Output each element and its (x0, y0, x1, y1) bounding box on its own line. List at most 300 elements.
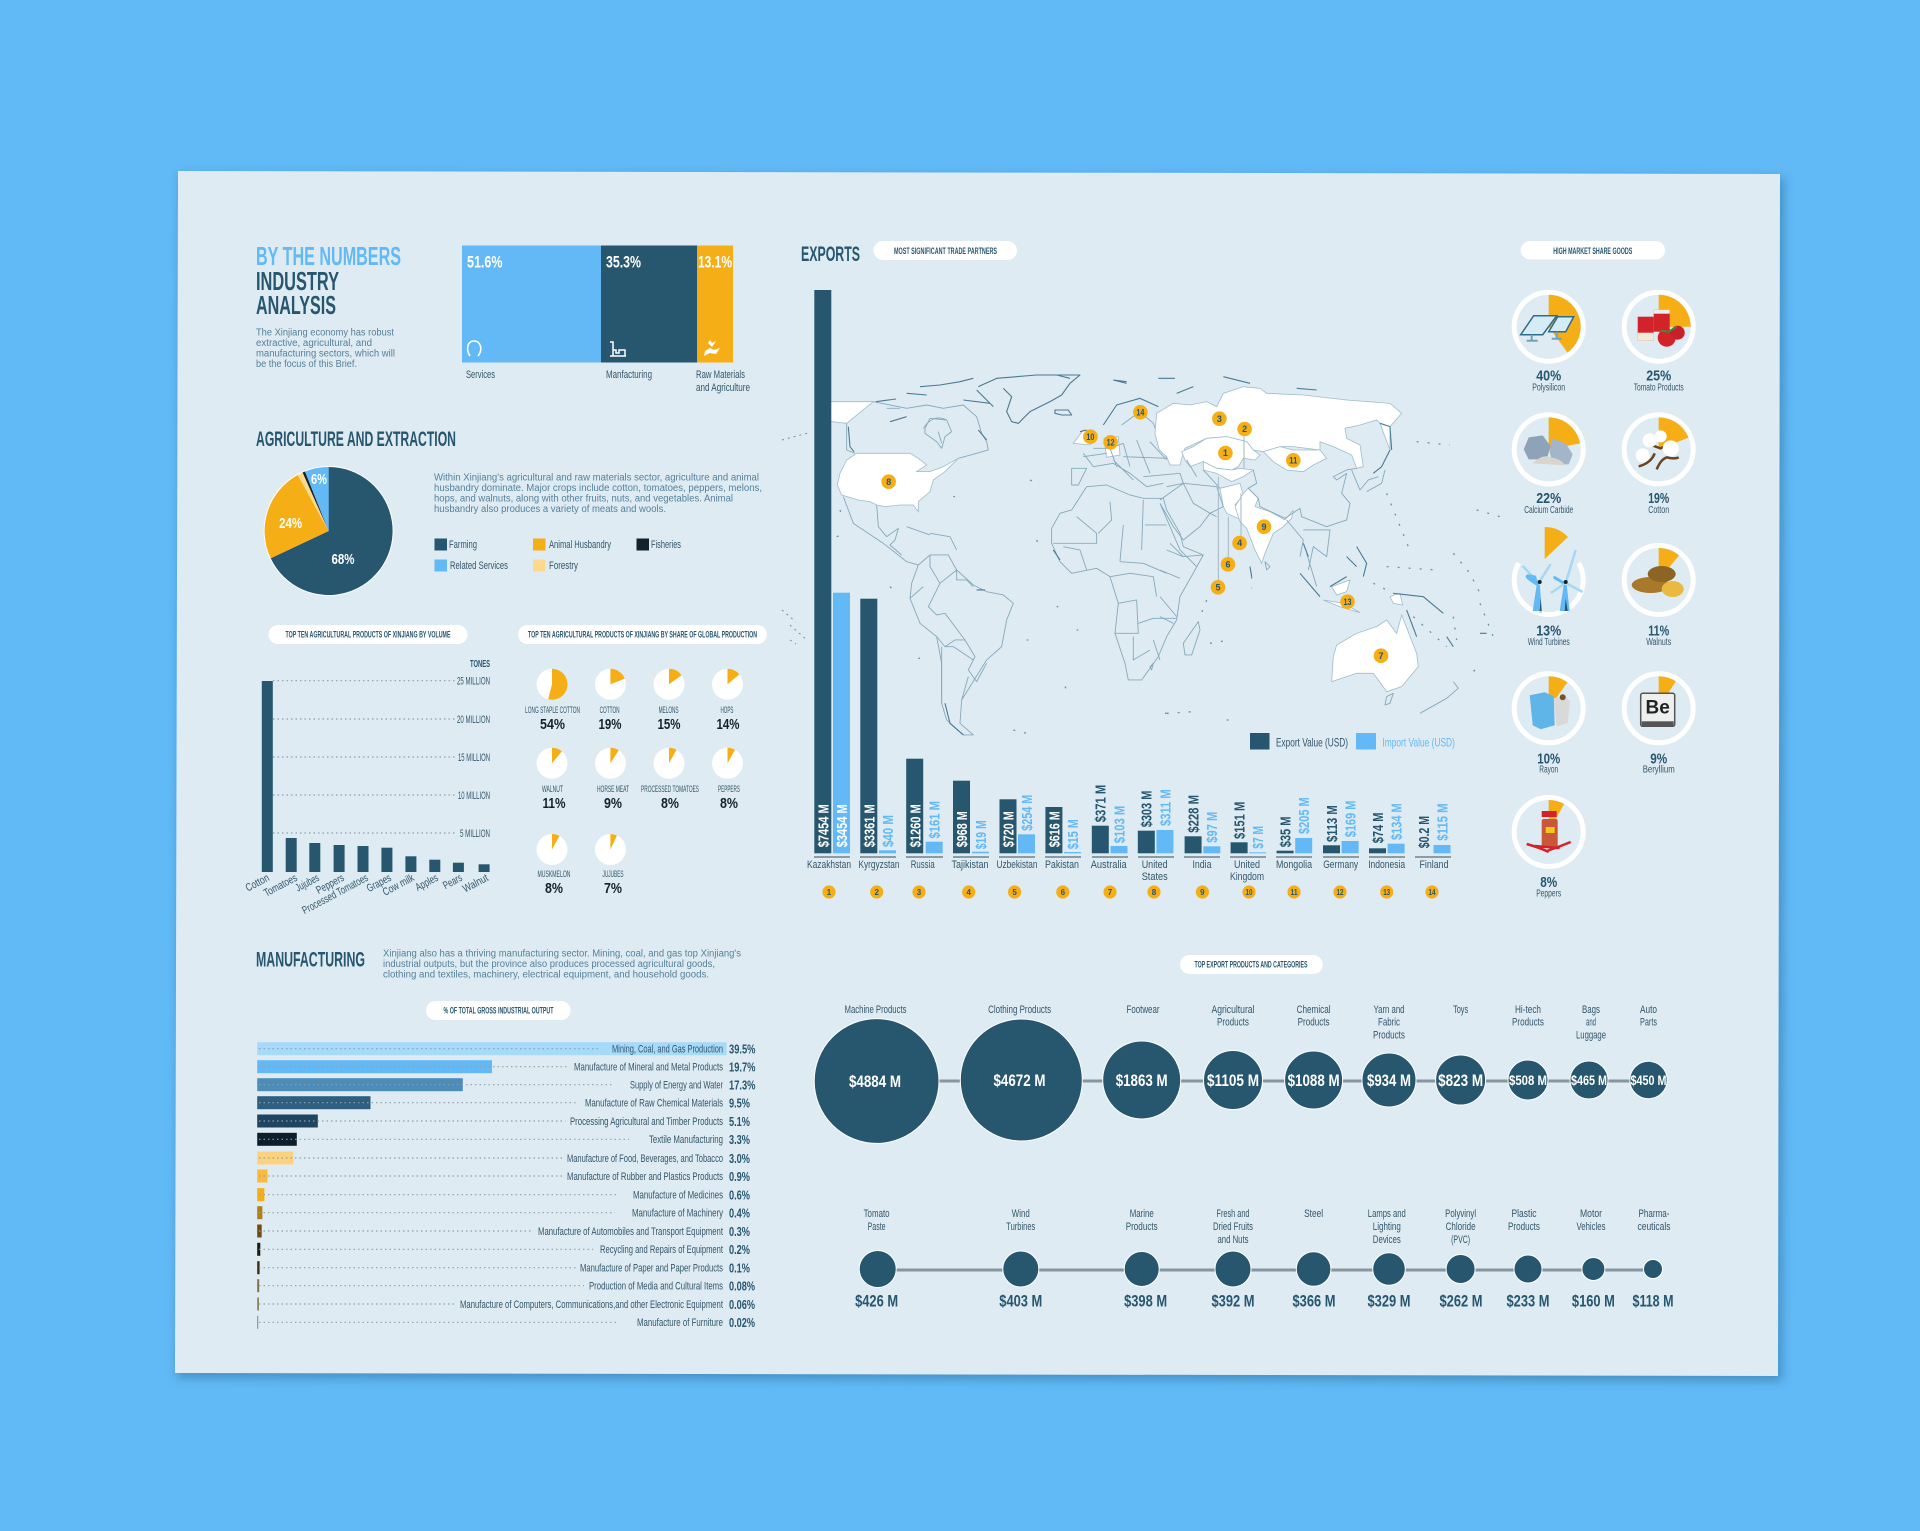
bubble row 1: Clothing Products (988, 1004, 1051, 1016)
bubble row 1: Luggage (1576, 1030, 1606, 1042)
trade partner bar chart: Australia (1091, 859, 1127, 871)
bubble row 1: Bags (1582, 1004, 1600, 1016)
map markers: 1 (1223, 448, 1228, 458)
bubble row 2: $329 M (1368, 1292, 1410, 1311)
share pies: 8% (720, 795, 738, 812)
tomato products (1624, 292, 1693, 394)
panel: top export products (814, 955, 1674, 1311)
bar chart: volume: Cow milk (381, 872, 417, 899)
beryllium: Be (1646, 697, 1670, 718)
peppers: Peppers (1536, 888, 1561, 900)
share pies: HOPS (720, 705, 734, 715)
trade partner bar chart: 2 (874, 888, 879, 897)
map: americas, atlantic, africa and europe (817, 375, 1203, 735)
trade partner bar chart: Russia (911, 859, 935, 871)
trade partner bar chart: 7 (1108, 888, 1113, 897)
panel: by the numbers (256, 241, 750, 394)
pill heading: TOP TEN AGRICULTURAL PRODUCTS OF XINJIANG BY SHARE OF GLOBAL PRODUCTION (528, 630, 757, 640)
trade partner bar chart: 1 (827, 888, 832, 897)
bar chart: volume: TONES (470, 659, 490, 670)
bar chart: industrial output: 0.1% (729, 1260, 750, 1276)
stacked bar: economy by sector: Services (466, 369, 495, 381)
map markers: 3 (1217, 414, 1222, 424)
bar chart: industrial output: 9.5% (729, 1096, 750, 1110)
map markers: 4 (1237, 538, 1242, 548)
manufacturing text: Xinjiang also has a thriving manufacturing sector. Mining, coal, and gas top Xinjiang's (383, 948, 741, 960)
wind turbines: Wind Turbines (1528, 637, 1570, 648)
bar chart: volume: Apples (414, 872, 441, 894)
bar chart: industrial output: Supply of Energy and Water (630, 1080, 723, 1092)
bar chart: industrial output: 17.3% (729, 1078, 756, 1092)
trade partner bar chart: Kyrgyzstan (858, 859, 900, 871)
bubble row 2: Plastic (1512, 1208, 1537, 1220)
trade partner bar chart: $161 M (926, 801, 944, 838)
panel: top ten by volume (244, 625, 490, 917)
trade partner bar chart: United (1142, 859, 1168, 871)
bubble row 2: (PVC) (1451, 1234, 1470, 1246)
polysilicon (1514, 292, 1583, 394)
stacked bar: economy by sector: 51.6% (467, 252, 502, 272)
bar chart: volume: 5 MILLION (460, 828, 490, 840)
map markers: 14 (1136, 408, 1144, 418)
bubble row 2: Chloride (1446, 1221, 1476, 1233)
bubble row 1: Hi-tech (1515, 1004, 1541, 1016)
title: BY THE NUMBERS (256, 241, 401, 271)
heading: MANUFACTURING (256, 948, 365, 972)
calcium carbide: 22% (1536, 490, 1561, 507)
trade partner bar chart: 10 (1246, 888, 1253, 897)
trade partner bar chart: $1260 M (908, 804, 924, 847)
wind turbines (1514, 527, 1583, 648)
trade partner bar chart: $3454 M (834, 804, 851, 847)
share pies: 14% (716, 716, 740, 733)
bar chart: industrial output: 3.0% (729, 1151, 750, 1166)
bubble row 2: $398 M (1124, 1292, 1167, 1311)
calcium carbide (1514, 415, 1583, 516)
pill heading: TOP TEN AGRICULTURAL PRODUCTS OF XINJIANG BY VOLUME (286, 630, 450, 640)
bubble row 2: Tomato (864, 1208, 890, 1220)
bubble row 2: $262 M (1440, 1292, 1482, 1311)
bubble row 2: Turbines (1006, 1221, 1036, 1233)
trade partner bar chart: Mongolia (1276, 859, 1313, 871)
bar chart: industrial output: 3.3% (729, 1132, 750, 1147)
bubble row 2: Products (1126, 1221, 1158, 1233)
trade partner bar chart: $35 M (1278, 817, 1294, 847)
trade partner bar chart: 11 (1290, 888, 1298, 897)
pie chart: agriculture breakdown: 68% (332, 551, 354, 568)
map markers: 9 (1261, 522, 1267, 532)
bar chart: industrial output: Manufacture of Paper and Paper Products (580, 1262, 723, 1274)
bar chart: industrial output: 0.4% (729, 1206, 750, 1220)
walnuts: Walnuts (1646, 637, 1671, 648)
bubble row 2: $392 M (1212, 1292, 1254, 1311)
share pies: 11% (542, 795, 566, 812)
pill heading: % OF TOTAL GROSS INDUSTRIAL OUTPUT (444, 1006, 554, 1016)
intro text: extractive, agricultural, and (256, 338, 372, 349)
bar chart: industrial output (257, 1042, 756, 1330)
exports heading: EXPORTS (801, 243, 860, 266)
trade partner bar chart: $0.2 M (1416, 816, 1433, 848)
pill heading (1521, 241, 1665, 260)
beryllium: Beryllium (1643, 764, 1675, 775)
pie legend: Animal Husbandry (549, 539, 611, 551)
trade partner bar chart: Pakistan (1045, 859, 1079, 871)
pie chart: agriculture breakdown: 6% (311, 471, 327, 488)
cotton (1624, 415, 1693, 516)
share pies: PEPPERS (718, 784, 740, 794)
stacked bar: economy by sector: and Agriculture (696, 382, 750, 394)
peppers (1514, 798, 1583, 900)
trade partner bar chart: Kingdom (1230, 871, 1264, 883)
bubble row 1: Machine Products (844, 1004, 907, 1016)
bar chart: industrial output: 39.5% (729, 1042, 756, 1056)
peppers: 8% (1540, 874, 1557, 891)
bubble row 1: $823 M (1438, 1071, 1483, 1090)
pill heading: TOP EXPORT PRODUCTS AND CATEGORIES (1194, 960, 1308, 970)
bubble row 1: $4672 M (994, 1071, 1046, 1090)
bubble row 1: $1088 M (1288, 1071, 1340, 1090)
intro text: manufacturing sectors, which will (256, 348, 395, 360)
trade partner bar chart: 13 (1383, 888, 1391, 897)
trade partner bar chart: Kazakhstan (807, 859, 851, 871)
bar chart: industrial output: 0.3% (729, 1224, 750, 1239)
bubble row 2: Marine (1130, 1208, 1154, 1220)
bar chart: volume: Processed Tomatoes (300, 872, 371, 917)
cotton: 19% (1648, 490, 1669, 507)
rayon (1514, 674, 1583, 775)
pill heading (518, 625, 767, 644)
manufacturing text (383, 948, 741, 980)
trade partner bar chart: Indonesia (1368, 859, 1406, 871)
bar chart: industrial output: Processing Agricultural and Timber Products (570, 1116, 723, 1128)
trade partner bar chart: $303 M (1138, 791, 1156, 827)
trade partner bar chart: $15 M (1065, 819, 1082, 849)
pie legend: Related Services (450, 560, 508, 572)
bubble row 2: $426 M (855, 1292, 898, 1311)
manufacturing text: clothing and textiles, machinery, electrical equipment, and household goods. (383, 970, 709, 980)
bubble row 1: and (1586, 1016, 1596, 1028)
bar chart: industrial output: Manufacture of Medicines (633, 1190, 723, 1202)
bubble row 1: Chemical (1297, 1004, 1331, 1016)
bar chart: industrial output: Textile Manufacturing (649, 1134, 723, 1146)
share pies: 7% (604, 880, 622, 897)
pill heading (1180, 955, 1323, 974)
bubble row 1: $4884 M (849, 1072, 901, 1091)
bubble row 1: $465 M (1571, 1072, 1607, 1088)
bubble row 1 (814, 1004, 1667, 1143)
intro text (256, 328, 395, 370)
map markers: 5 (1215, 582, 1221, 592)
share pies: 19% (598, 716, 622, 733)
trade partner bar chart: $205 M (1296, 797, 1313, 834)
trade partner bar chart: United (1234, 859, 1260, 871)
bar chart: industrial output: Mining, Coal, and Gas Production (612, 1044, 723, 1056)
bubble row 2: Dried Fruits (1213, 1221, 1253, 1233)
walnuts: 11% (1648, 622, 1669, 640)
bubble row 2: $118 M (1632, 1292, 1674, 1311)
trade partner bar chart: $151 M (1232, 802, 1248, 839)
agriculture text: husbandry also produces a variety of meats and wools. (434, 504, 666, 515)
bubble row 1: $934 M (1367, 1071, 1411, 1090)
agriculture text: Within Xinjiang's agricultural and raw materials sector, agriculture and animal (434, 472, 759, 484)
share pies: COTTON (600, 705, 620, 715)
trade partner bar chart: Tajikistan (952, 859, 988, 871)
bar chart: volume: Cotton (244, 872, 271, 894)
stacked bar: economy by sector: Raw Materials (696, 369, 745, 381)
bubble row 2 (855, 1208, 1674, 1311)
bar chart: volume: 15 MILLION (458, 752, 490, 764)
world map (782, 375, 1500, 735)
bar chart: industrial output: 0.08% (729, 1278, 755, 1294)
map markers (881, 405, 1388, 663)
trade partner bar chart: 12 (1336, 888, 1344, 897)
stacked bar: economy by sector: 35.3% (606, 252, 641, 272)
share pies: WALNUT (542, 784, 563, 794)
trade partner bar chart: $311 M (1158, 789, 1174, 826)
bar chart: industrial output: Manufacture of Rubber and Plastics Products (567, 1171, 723, 1183)
bubble row 1: Auto (1640, 1004, 1657, 1016)
bubble row 1: $508 M (1509, 1072, 1547, 1088)
share pies: MELONS (659, 705, 679, 715)
intro text: be the focus of this Brief. (256, 359, 357, 370)
bar chart: volume: Grapes (365, 872, 394, 895)
bar chart: industrial output: 0.02% (729, 1315, 755, 1330)
bubble row 2: Lighting (1373, 1221, 1401, 1233)
pie chart: agriculture breakdown (264, 466, 394, 596)
bar chart: volume: Peppers (314, 872, 347, 897)
trade partner bar chart: 4 (966, 888, 971, 897)
bubble row 2: Fresh and (1216, 1208, 1250, 1220)
cotton: Cotton (1648, 505, 1669, 516)
tomato products: Tomato Products (1634, 383, 1684, 394)
trade partner bar chart: $19 M (973, 820, 990, 849)
trade partner bar chart: Uzbekistan (996, 859, 1038, 871)
share pies: HORSE MEAT (597, 784, 629, 794)
trade partner bar chart: $968 M (954, 811, 971, 847)
rayon: Rayon (1539, 764, 1558, 775)
polysilicon: Polysilicon (1532, 383, 1565, 394)
map legend: Import Value (USD) (1382, 736, 1455, 750)
stacked bar: economy by sector: Manfacturing (606, 369, 652, 381)
trade partner bar chart: $371 M (1092, 785, 1110, 822)
bubble row 2: Steel (1304, 1208, 1323, 1220)
bar chart: volume: Jujubes (294, 872, 322, 894)
bubble row 1: Footwear (1126, 1004, 1160, 1016)
agriculture text: hops, and walnuts, along with other fruits, nuts, and vegetables. Animal (434, 494, 733, 504)
share pies: LONG STAPLE COTTON (525, 705, 580, 715)
bubble row 1: Products (1217, 1016, 1249, 1028)
polysilicon: 40% (1536, 368, 1561, 385)
bubble row 2: and Nuts (1218, 1234, 1249, 1246)
map markers: 7 (1378, 651, 1384, 661)
bar chart: volume: 25 MILLION (457, 676, 490, 688)
rayon: 10% (1537, 750, 1560, 767)
bar chart: industrial output: Manufacture of Raw Chemical Materials (585, 1098, 723, 1110)
bar chart: industrial output: Manufacture of Computers, Communications,and other Electronic Equipment (460, 1299, 723, 1311)
trade partner bar chart: $254 M (1019, 795, 1036, 831)
bubble row 1: Toys (1453, 1004, 1468, 1016)
beryllium: 9% (1650, 750, 1667, 767)
bubble row 2: Vehicles (1576, 1221, 1606, 1233)
bubble row 2: Lamps and (1368, 1208, 1406, 1220)
bubble row 2: Wind (1012, 1208, 1030, 1220)
map markers: 13 (1344, 597, 1352, 607)
pie legend: Farming (449, 539, 477, 551)
bar chart: industrial output: 0.2% (729, 1242, 750, 1257)
stacked bar: economy by sector: 13.1% (698, 252, 732, 272)
bar chart: industrial output: Manufacture of Machinery (632, 1208, 723, 1220)
beryllium (1624, 674, 1693, 775)
agriculture text (434, 472, 762, 515)
bubble row 2: Motor (1580, 1208, 1602, 1220)
bar chart: industrial output: 0.9% (729, 1169, 750, 1184)
map markers: 2 (1242, 424, 1247, 434)
trade partner bar chart: 5 (1012, 888, 1017, 897)
bar chart: industrial output: Manufacture of Food, Beverages, and Tobacco (567, 1153, 723, 1165)
trade partner bar chart: 14 (1428, 888, 1436, 897)
trade partner bar chart: 8 (1152, 888, 1157, 897)
title: ANALYSIS (256, 290, 336, 320)
trade partner bar chart: Finland (1420, 859, 1448, 871)
calcium carbide: Calcium Carbide (1524, 505, 1573, 516)
pie legend (434, 538, 681, 572)
map markers: 12 (1107, 438, 1115, 448)
pill heading (268, 625, 468, 644)
share pies: JUJUBES (602, 869, 624, 879)
pill heading: HIGH MARKET SHARE GOODS (1553, 246, 1632, 256)
title: INDUSTRY (256, 266, 339, 296)
bubble row 2: Polyvinyl (1445, 1208, 1476, 1220)
bubble row 2: Pharma- (1638, 1208, 1670, 1220)
bar chart: industrial output: 0.06% (729, 1297, 755, 1312)
map markers: 6 (1225, 560, 1231, 570)
agriculture text: husbandry dominate. Major crops include cotton, tomatoes, peppers, melons, (434, 483, 762, 494)
trade partner bar chart: 9 (1200, 888, 1205, 897)
map markers: 11 (1289, 456, 1297, 466)
trade partner bar chart: $3361 M (862, 804, 878, 847)
pie legend: Forestry (549, 560, 578, 572)
share pies: 8% (661, 795, 679, 812)
trade partner bar chart: Germany (1323, 859, 1359, 871)
bubble row 2: Paste (868, 1221, 886, 1233)
bar chart: industrial output: Manufacture of Mineral and Metal Products (574, 1062, 723, 1074)
pill: most significant trade partners (874, 241, 1017, 260)
trade partner bar chart: $74 M (1370, 813, 1387, 843)
bar chart: industrial output: Manufacture of Automobiles and Transport Equipment (538, 1226, 723, 1238)
trade partner bar chart (807, 290, 1452, 899)
bubble row 1: Yarn and (1374, 1004, 1404, 1016)
bar chart: industrial output: 5.1% (729, 1114, 750, 1129)
trade partner bar chart: $134 M (1388, 803, 1406, 840)
bar chart: volume: Pears (441, 872, 465, 892)
trade partner bar chart: $720 M (1000, 811, 1018, 847)
trade partner bar chart: $103 M (1112, 806, 1128, 843)
bubble row 1: Products (1512, 1016, 1544, 1028)
bar chart: industrial output: 19.7% (729, 1060, 756, 1074)
share pies: 9% (604, 795, 622, 812)
pill heading (426, 1001, 571, 1020)
walnuts (1624, 546, 1693, 648)
trade partner bar chart: $113 M (1324, 805, 1341, 842)
bubble row 1: Fabric (1378, 1016, 1400, 1028)
share pies (525, 669, 743, 897)
bubble row 2: $233 M (1506, 1292, 1550, 1311)
bar chart: volume: 20 MILLION (457, 714, 490, 726)
trade partner bar chart: India (1192, 859, 1212, 871)
bar chart: industrial output: Production of Media and Cultural Items (589, 1280, 723, 1292)
share pies: 15% (658, 716, 680, 733)
bar chart: volume: Walnut (461, 872, 490, 895)
bubble row 1: $1863 M (1116, 1071, 1168, 1090)
title (256, 241, 401, 320)
pie legend: Fisheries (651, 539, 681, 551)
share pies: 8% (545, 880, 563, 897)
bubble row 1: Products (1298, 1016, 1330, 1028)
bubble row 2: ceuticals (1638, 1221, 1671, 1233)
share pies: 54% (540, 716, 565, 733)
map markers: 10 (1086, 432, 1094, 442)
paper sheet (175, 171, 1780, 1376)
bubble row 1: Agricultural (1212, 1004, 1254, 1016)
bubble row 1: Parts (1640, 1016, 1657, 1028)
manufacturing text: industrial outputs, but the province also produces processed agricultural goods, (383, 959, 715, 970)
wind turbines: 13% (1536, 622, 1561, 640)
trade partner bar chart: 6 (1061, 888, 1066, 897)
trade partner bar chart: $7 M (1250, 826, 1267, 849)
map legend (1250, 733, 1455, 750)
bubble row 1: $450 M (1630, 1072, 1666, 1088)
bar chart: industrial output: Recycling and Repairs of Equipment (600, 1244, 723, 1256)
bubble row 1: $1105 M (1207, 1071, 1259, 1090)
bubble row 2: $160 M (1572, 1292, 1615, 1311)
trade partner bar chart: $115 M (1434, 803, 1452, 841)
heading: AGRICULTURE AND EXTRACTION (256, 428, 456, 451)
stacked bar: economy by sector (462, 246, 750, 394)
bubble row 2: $366 M (1292, 1292, 1336, 1311)
panel: high market share goods (1514, 241, 1693, 900)
bubble row 2: Products (1508, 1221, 1540, 1233)
trade partner bar chart: $7454 M (816, 804, 832, 847)
pill: most significant trade partners: MOST SIGNIFICANT TRADE PARTNERS (894, 246, 997, 256)
bubble row 2: $403 M (999, 1292, 1042, 1311)
bubble row 2: Devices (1373, 1234, 1401, 1246)
map legend: Export Value (USD) (1276, 736, 1348, 750)
trade partner bar chart: $616 M (1046, 811, 1064, 847)
share pies: PROCESSED TOMATOES (641, 784, 699, 794)
bar chart: volume (244, 659, 490, 917)
bar chart: volume: Tomatoes (262, 872, 300, 900)
map markers: 8 (886, 477, 891, 487)
trade partner bar chart: $228 M (1186, 795, 1202, 833)
trade partner bar chart: $169 M (1342, 801, 1360, 837)
panel: agriculture and extraction (256, 428, 762, 596)
trade partner bar chart: $97 M (1204, 812, 1221, 843)
bubble row 1: Products (1373, 1030, 1405, 1042)
bar chart: industrial output: 0.6% (729, 1188, 750, 1202)
tomato products: 25% (1646, 368, 1671, 385)
pie chart: agriculture breakdown: 24% (279, 515, 302, 532)
panel: exports (782, 241, 1500, 899)
bar chart: industrial output: Manufacture of Furniture (637, 1317, 723, 1329)
intro text: The Xinjiang economy has robust (256, 328, 394, 338)
trade partner bar chart: States (1142, 871, 1168, 883)
trade partner bar chart: 3 (917, 888, 922, 897)
map: asia and oceania (1143, 377, 1500, 720)
share pies: MUSKMELON (538, 869, 570, 879)
bar chart: volume: 10 MILLION (458, 790, 490, 802)
panel: manufacturing (256, 948, 756, 1330)
trade partner bar chart: $40 M (880, 815, 897, 847)
